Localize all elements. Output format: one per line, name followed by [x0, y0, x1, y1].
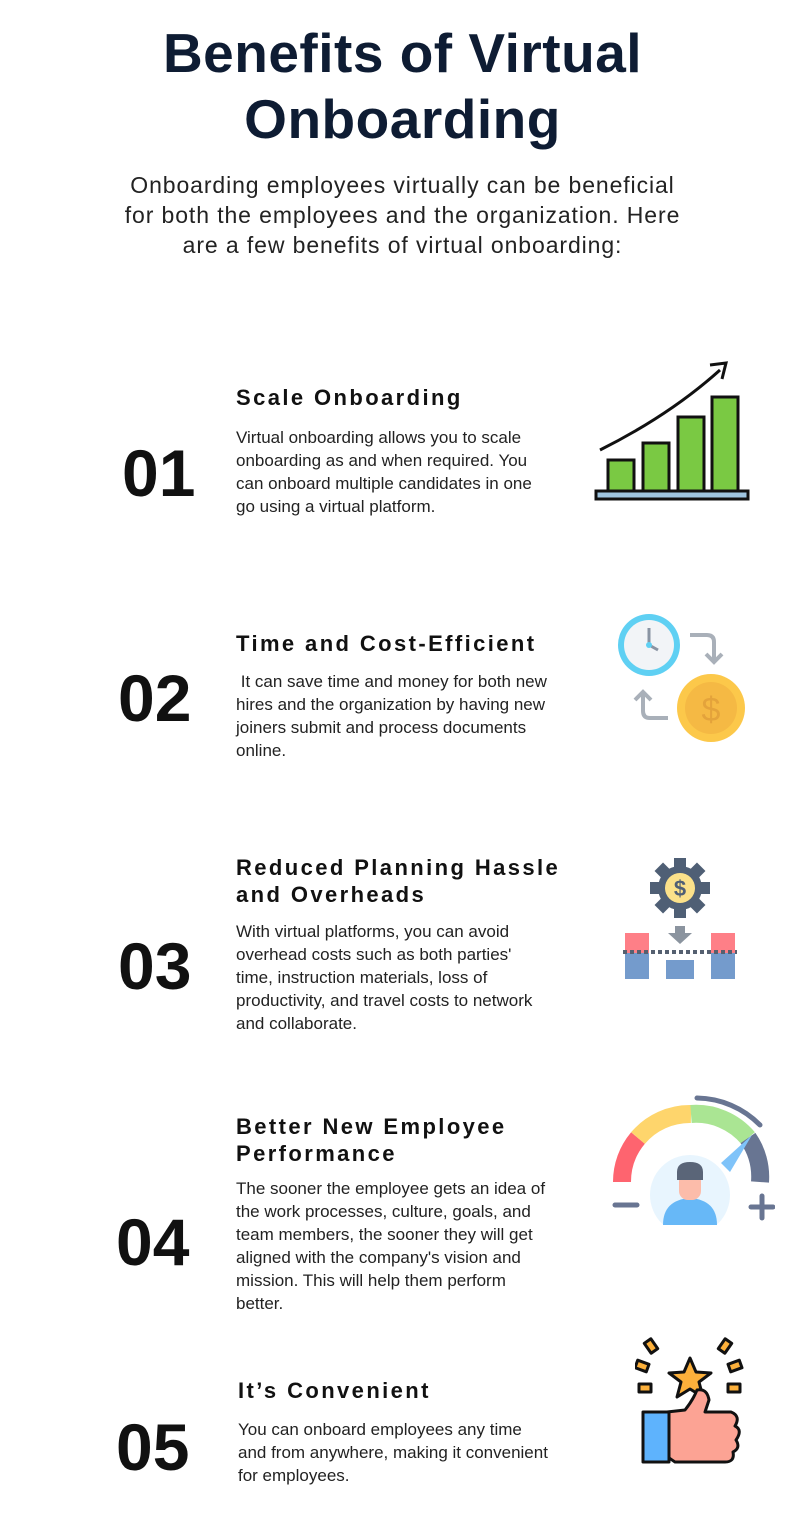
- icon: performance gauge: [612, 1096, 775, 1225]
- section 01: [122, 385, 532, 516]
- number 02: 02: [118, 661, 191, 735]
- section 05: [116, 1378, 548, 1485]
- body 04: aligned with the company's vision and: [236, 1248, 521, 1267]
- body 04: better.: [236, 1294, 283, 1313]
- number 01: 01: [122, 436, 195, 510]
- section 04: [116, 1114, 546, 1313]
- heading 01: Scale Onboarding: [236, 385, 463, 410]
- heading 03: and Overheads: [236, 882, 426, 907]
- icon: thumbs up with star: [635, 1337, 744, 1464]
- body 04: mission. This will help them perform: [236, 1271, 506, 1290]
- body 01: go using a virtual platform.: [236, 497, 435, 516]
- subtitle: Onboarding employees virtually can be beneficial: [130, 172, 675, 198]
- icon: bar chart: [594, 361, 750, 500]
- title: Onboarding: [244, 88, 561, 150]
- body 05: and from anywhere, making it convenient: [238, 1443, 548, 1462]
- icon: clock and coin: [618, 614, 745, 742]
- body 02: It can save time and money for both new: [241, 672, 547, 691]
- section 03: [118, 855, 560, 1033]
- body 01: Virtual onboarding allows you to scale: [236, 428, 521, 447]
- heading 03: Reduced Planning Hassle: [236, 855, 560, 880]
- title: [163, 22, 642, 150]
- body 02: online.: [236, 741, 286, 760]
- number 04: 04: [116, 1205, 189, 1279]
- body 03: overhead costs such as both parties': [236, 945, 511, 964]
- body 02: joiners submit and process documents: [236, 718, 526, 737]
- body 04: team members, the sooner they will get: [236, 1225, 533, 1244]
- heading 03: [236, 855, 560, 907]
- body 05: for employees.: [238, 1466, 350, 1485]
- body 03: [236, 922, 532, 1033]
- heading 04: Performance: [236, 1141, 397, 1166]
- number 03: 03: [118, 929, 191, 1003]
- subtitle: are a few benefits of virtual onboarding:: [183, 232, 622, 258]
- body 03: time, instruction materials, loss of: [236, 968, 487, 987]
- body 04: the work processes, culture, goals, and: [236, 1202, 531, 1221]
- subtitle: for both the employees and the organization. Here: [125, 202, 680, 228]
- body 02: [236, 672, 547, 760]
- subtitle: [125, 172, 680, 258]
- body 04: [236, 1179, 546, 1313]
- title: Benefits of Virtual: [163, 22, 642, 84]
- body 03: productivity, and travel costs to network: [236, 991, 532, 1010]
- body 05: [238, 1420, 548, 1485]
- body 01: can onboard multiple candidates in one: [236, 474, 532, 493]
- number 05: 05: [116, 1410, 189, 1484]
- body 03: With virtual platforms, you can avoid: [236, 922, 509, 941]
- body 01: onboarding as and when required. You: [236, 451, 527, 470]
- body 05: You can onboard employees any time: [238, 1420, 522, 1439]
- heading 04: Better New Employee: [236, 1114, 507, 1139]
- section 02: [118, 631, 547, 760]
- icon: gear and blocks: [623, 858, 737, 979]
- icon: clock and coin: $: [702, 691, 721, 729]
- body 01: [236, 428, 532, 516]
- body 04: The sooner the employee gets an idea of: [236, 1179, 545, 1198]
- body 03: and collaborate.: [236, 1014, 357, 1033]
- heading 05: It’s Convenient: [238, 1378, 431, 1403]
- heading 02: Time and Cost-Efficient: [236, 631, 536, 656]
- icon: gear and blocks: $: [674, 876, 686, 901]
- body 02: hires and the organization by having new: [236, 695, 545, 714]
- heading 04: [236, 1114, 507, 1166]
